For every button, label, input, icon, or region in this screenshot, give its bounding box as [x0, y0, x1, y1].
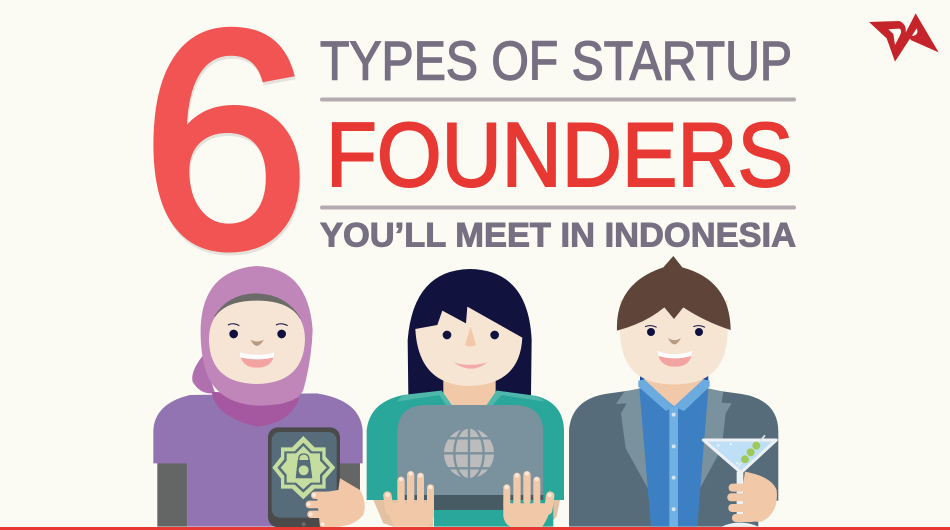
hand — [743, 472, 777, 522]
left hand — [383, 471, 434, 527]
eyes — [443, 331, 499, 339]
martini bowl — [703, 440, 776, 473]
neck — [443, 373, 496, 407]
hand — [317, 478, 365, 527]
hijab knot — [192, 355, 215, 394]
globe icon — [443, 427, 495, 480]
eyes — [229, 330, 286, 338]
eyes — [647, 328, 703, 336]
face — [415, 307, 522, 386]
logo — [869, 13, 939, 62]
shirt — [639, 388, 708, 527]
collar — [397, 391, 545, 405]
inner collar — [640, 376, 708, 383]
fingers — [306, 492, 337, 527]
nose — [252, 341, 263, 345]
hijab — [201, 266, 313, 406]
neck — [644, 373, 703, 407]
placket — [669, 407, 678, 527]
bottom red bar — [0, 527, 950, 530]
face — [209, 301, 305, 384]
hair band — [214, 293, 301, 318]
fingers — [727, 484, 755, 522]
collar — [638, 379, 710, 411]
teal shirt — [367, 391, 564, 527]
tablet — [268, 427, 340, 527]
mouth — [658, 352, 692, 367]
right hand — [503, 471, 555, 527]
founder: woman in hijab with tablet — [153, 266, 365, 527]
founder: man with cocktail — [569, 256, 778, 527]
glass stem and base — [722, 472, 758, 527]
cocktail pick — [738, 435, 765, 467]
laptop — [397, 405, 543, 495]
face — [620, 300, 728, 384]
nose — [465, 327, 476, 346]
laptop base — [397, 495, 543, 510]
grey sleeves — [157, 460, 360, 527]
eyebrows — [228, 324, 288, 326]
eyebrows — [645, 326, 705, 327]
title line: founders: FOUNDERS — [326, 105, 793, 206]
hair — [617, 256, 731, 331]
bubbles — [717, 443, 738, 464]
star badge — [272, 436, 335, 499]
jacket — [569, 389, 778, 527]
fingernails — [386, 472, 552, 497]
buttons — [672, 413, 676, 511]
hair — [408, 269, 532, 397]
olives — [741, 442, 760, 463]
nose — [669, 339, 680, 344]
lapels — [616, 388, 732, 489]
purple shirt — [153, 393, 363, 527]
title line: you'll meet in Indonesia: YOU’LL MEET IN INDONESIA — [320, 216, 796, 254]
title line: types of startup: TYPES OF STARTUP — [320, 30, 792, 92]
founder: woman with laptop — [367, 269, 564, 527]
hijab drape — [212, 392, 299, 427]
mouth — [453, 362, 487, 369]
mouth — [240, 353, 274, 368]
forearms — [373, 500, 560, 527]
fingernails — [307, 493, 325, 526]
